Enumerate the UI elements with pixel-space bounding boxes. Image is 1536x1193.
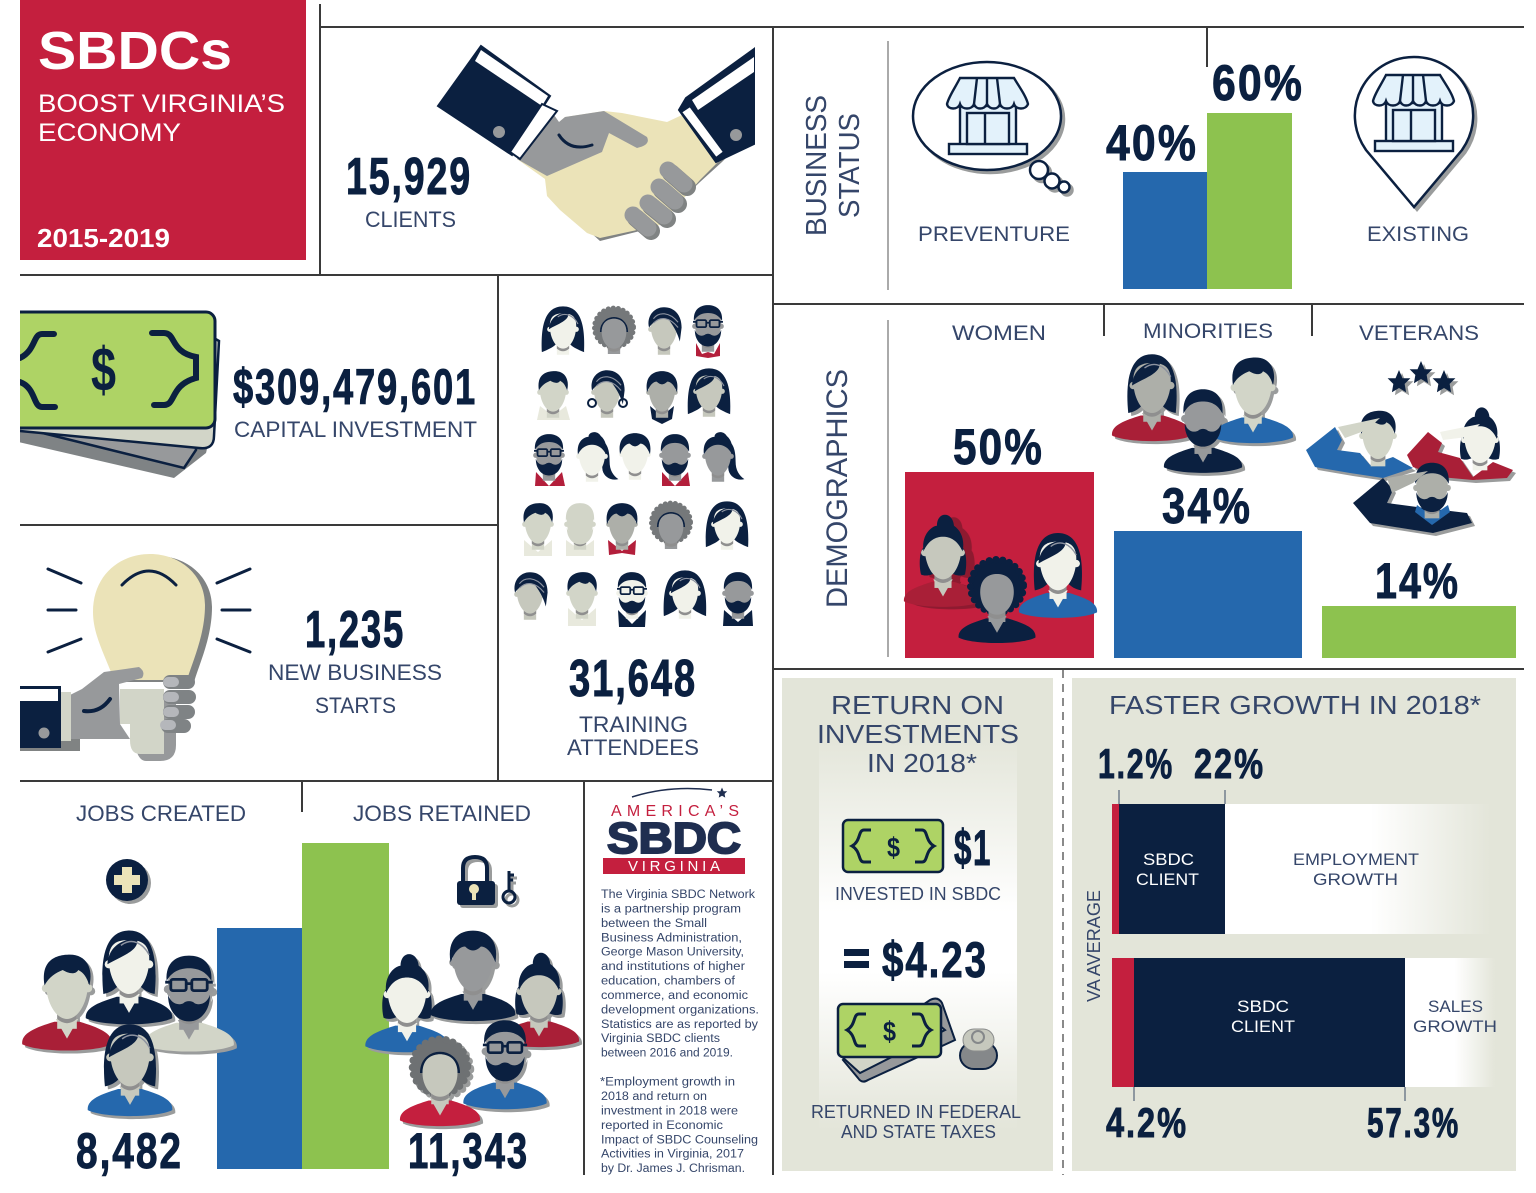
text: footnote: investment in 2018 were — [601, 1106, 738, 1118]
icon: money stack — [8, 312, 219, 478]
label: minorities: MINORITIES — [1143, 320, 1273, 343]
label: existing: EXISTING — [1367, 223, 1469, 246]
bar: minorities — [1114, 531, 1302, 658]
label: new business starts — [268, 660, 442, 718]
panel: training attendees — [514, 305, 754, 760]
text: about the network — [601, 889, 759, 1060]
heading: return on investments: INVESTMENTS — [817, 719, 1019, 749]
panel: jobs — [22, 801, 579, 1179]
label: women: WOMEN — [952, 322, 1046, 345]
text: footnote — [600, 1076, 758, 1175]
stat: VA employment growth: 1.2% — [1098, 740, 1174, 787]
label: returned in taxes — [811, 1102, 1021, 1142]
text: about the network: is a partnership program — [601, 904, 741, 916]
label: clients: CLIENTS — [365, 207, 456, 232]
text: about the network: education, chambers of — [601, 976, 736, 988]
stat: jobs retained: 11,343 — [408, 1123, 529, 1179]
icon: saluting veterans — [1306, 407, 1513, 533]
heading: return on investments: RETURN ON — [831, 690, 1004, 720]
stat: 40 percent: 40% — [1106, 115, 1198, 171]
text: about the network: between 2016 and 2019. — [601, 1048, 733, 1060]
logo: America's SBDC Virginia — [603, 788, 745, 875]
icon: group of jobs created people — [22, 931, 234, 1116]
chart: employment growth: GROWTH — [1313, 870, 1398, 889]
chart: sales growth: GROWTH — [1413, 1017, 1497, 1036]
label: jobs retained: JOBS RETAINED — [353, 801, 531, 826]
label: capital investment: CAPITAL INVESTMENT — [234, 417, 477, 442]
stat: 14 percent: 14% — [1375, 553, 1460, 609]
stat: jobs created: 8,482 — [76, 1123, 183, 1179]
chart: sales growth: SBDC — [1237, 997, 1289, 1016]
label: training attendees — [567, 712, 699, 760]
bar: women — [905, 472, 1094, 658]
text: footnote: reported in Economic — [601, 1120, 723, 1132]
label: business status — [801, 95, 866, 236]
label: returned in taxes: RETURNED IN FEDERAL — [811, 1102, 1021, 1122]
label: business status: STATUS — [834, 113, 866, 218]
label: jobs created: JOBS CREATED — [76, 801, 246, 826]
icon: money and coins: $ — [883, 1016, 896, 1047]
panel: new business starts — [20, 554, 442, 761]
title: SBDCs: SBDCs — [38, 21, 232, 81]
stat: attendees: 31,648 — [569, 650, 697, 708]
icon: map pin with store — [1355, 57, 1473, 207]
subtitle — [38, 90, 285, 147]
stat: return value — [844, 932, 988, 988]
icon: lightbulb in hand — [20, 554, 250, 761]
stat: clients: 15,929 — [346, 148, 472, 206]
stat: 50 percent: 50% — [953, 419, 1044, 475]
panel: clients — [346, 46, 754, 241]
bar: existing — [1207, 113, 1292, 289]
chart: employment growth: SBDC — [1143, 850, 1194, 869]
date range: 2015-2019 — [37, 223, 170, 253]
label: preventure: PREVENTURE — [918, 223, 1070, 246]
chart: sales growth — [1112, 958, 1497, 1101]
icon: stars — [1388, 361, 1455, 392]
text: about the network: The Virginia SBDC Network — [601, 889, 755, 901]
bar: jobs retained — [302, 843, 389, 1169]
panel: business status — [801, 55, 1473, 289]
icon: money stack: $ — [91, 336, 116, 405]
icon: money and coins — [838, 999, 997, 1082]
chart: employment growth: EMPLOYMENT — [1293, 850, 1419, 869]
chart: employment growth — [1112, 790, 1490, 934]
stat: new business starts: 1,235 — [305, 601, 405, 659]
text: about the network: commerce, and economic — [601, 990, 748, 1002]
heading: return on investments — [817, 690, 1019, 778]
label: invested in SBDC: INVESTED IN SBDC — [835, 884, 1001, 904]
stat: one dollar: $1 — [954, 820, 992, 876]
text: about the network: Virginia SBDC clients — [601, 1033, 720, 1045]
panel: return on investments — [782, 678, 1053, 1171]
stat: VA sales growth: 4.2% — [1106, 1099, 1188, 1146]
heading: faster growth: FASTER GROWTH IN 2018* — [1109, 690, 1481, 720]
text: footnote: Activities in Virginia, 2017 — [601, 1148, 744, 1160]
logo: America's SBDC Virginia: VIRGINIA — [628, 858, 720, 875]
text: footnote: *Employment growth in — [600, 1076, 735, 1088]
label: new business starts: STARTS — [315, 693, 396, 718]
icon: group of minorities — [1112, 354, 1293, 473]
stat: client employment growth: 22% — [1194, 740, 1265, 787]
text: about the network: between the Small — [601, 918, 707, 930]
text: about the network: George Mason University, — [601, 946, 744, 958]
label: demographics: DEMOGRAPHICS — [821, 369, 854, 608]
icon: thought bubble with store — [913, 62, 1070, 192]
icon: handshake — [438, 46, 754, 241]
icon: group of women — [904, 515, 1097, 643]
text: footnote: Impact of SBDC Counseling — [601, 1134, 758, 1146]
bar: jobs created — [217, 928, 302, 1169]
chart: sales growth: CLIENT — [1231, 1017, 1295, 1036]
chart: sales growth: SALES — [1428, 997, 1483, 1016]
text: about the network: Business Administration, — [601, 932, 742, 944]
icon: padlock and key — [457, 857, 515, 905]
text: about the network: Statistics are as reported by — [601, 1019, 758, 1031]
label: business status: BUSINESS — [801, 95, 833, 236]
text: footnote: by Dr. James J. Chrisman. — [601, 1163, 745, 1175]
icon: plus — [106, 859, 148, 901]
text: about the network: development organizations. — [601, 1004, 759, 1016]
panel: demographics — [821, 320, 1516, 658]
subtitle: BOOST VIRGINIA’S — [38, 90, 285, 118]
text: footnote: 2018 and return on — [601, 1091, 707, 1103]
panel: capital investment — [8, 312, 477, 478]
icon: grid of attendee faces — [514, 305, 754, 627]
bar: preventure — [1123, 172, 1207, 289]
chart: employment growth: CLIENT — [1136, 870, 1199, 889]
panel: title — [20, 0, 306, 260]
panel: faster growth — [1072, 678, 1516, 1171]
heading: return on investments: IN 2018* — [867, 748, 977, 778]
label: new business starts: NEW BUSINESS — [268, 660, 442, 685]
stat: 60 percent: 60% — [1212, 55, 1304, 111]
stat: capital: $309,479,601 — [233, 359, 477, 415]
label: veterans: VETERANS — [1359, 322, 1479, 345]
stat: return value: $4.23 — [882, 932, 988, 988]
logo: America's SBDC Virginia: AMERICA’S — [611, 803, 739, 820]
logo: America's SBDC Virginia: SBDC — [607, 814, 741, 863]
icon: dollar bill — [843, 820, 943, 872]
label: returned in taxes: AND STATE TAXES — [841, 1122, 996, 1142]
label: training attendees: TRAINING — [579, 712, 688, 737]
bar: veterans — [1322, 606, 1516, 658]
icon: group of jobs retained people — [365, 931, 579, 1126]
icon: dollar bill: $ — [887, 832, 900, 863]
text: about the network: and institutions of higher — [601, 961, 745, 973]
panel: about — [600, 788, 759, 1175]
subtitle: ECONOMY — [38, 119, 181, 147]
label: VA average: VA AVERAGE — [1084, 890, 1104, 1002]
stat: client sales growth: 57.3% — [1367, 1099, 1460, 1146]
stat: 34 percent: 34% — [1162, 478, 1252, 534]
label: training attendees: ATTENDEES — [567, 735, 699, 760]
